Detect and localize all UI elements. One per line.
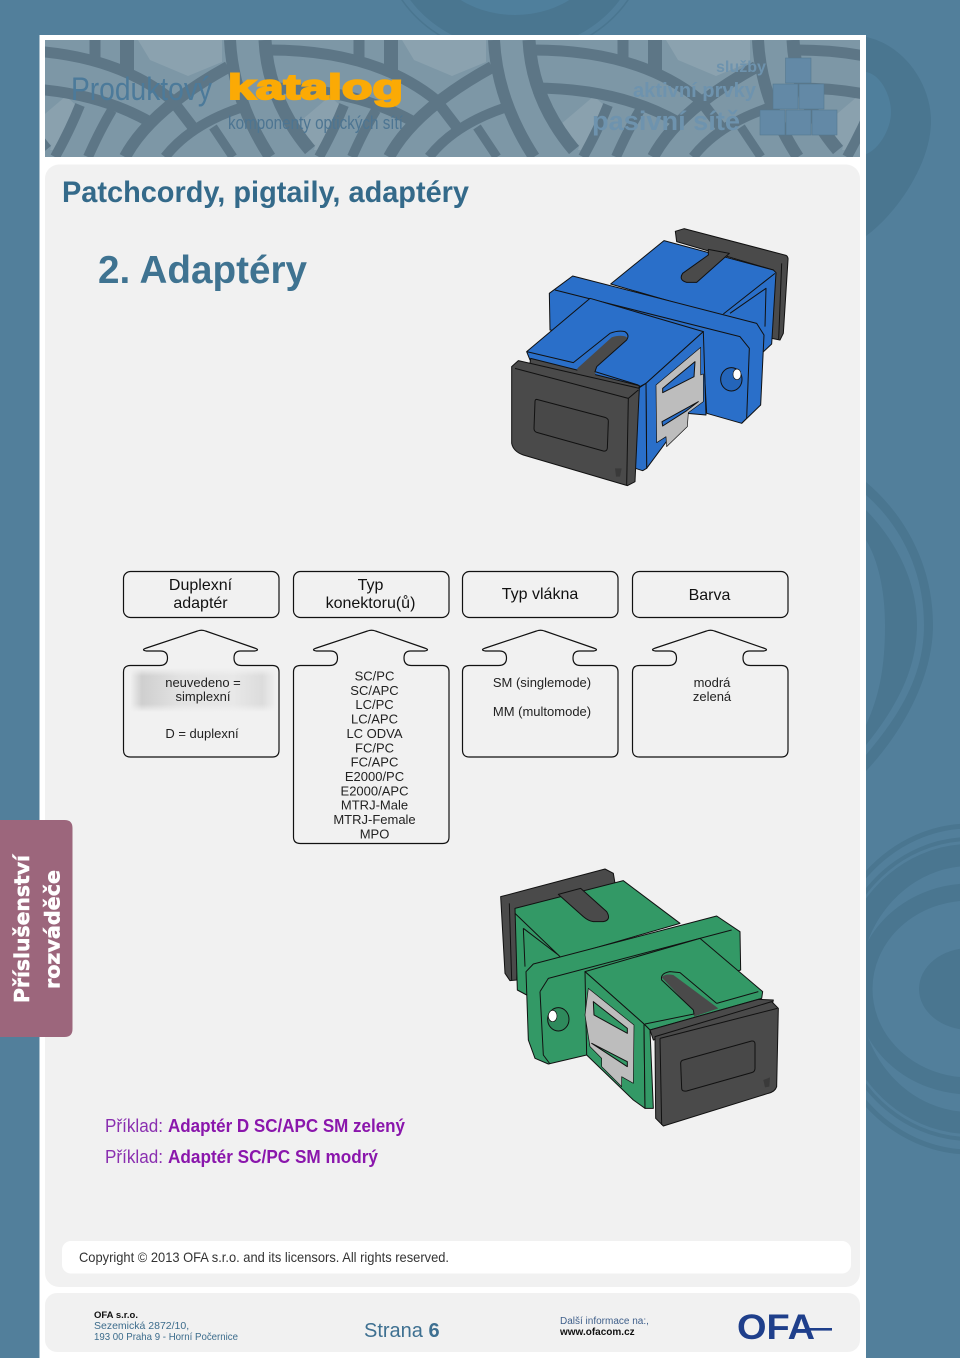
heading: Adaptéry: 2. Adaptéry: [98, 249, 307, 292]
footer address: Sezemická 2872/10,: [94, 1320, 189, 1332]
footer web info: Další informace na:,: [560, 1316, 649, 1327]
header subtitle: komponenty optických sítí: [228, 113, 403, 133]
callout: colours: [632, 630, 788, 757]
box: Duplexní adaptér: [124, 572, 279, 618]
header label: služby: služby: [716, 59, 766, 76]
copyright bar: Copyright © 2013 OFA s.r.o. and its licensors. All rights reserved.: [79, 1249, 449, 1265]
text block: examples: Příklad:: [105, 1147, 163, 1167]
callout: connector types: SC/PC: [355, 668, 394, 684]
callout: duplex options: D = duplexní: [165, 726, 239, 741]
diagram: ordering code: [124, 572, 788, 844]
box: Barva: [632, 572, 788, 618]
header label: aktivní prvky: aktivní prvky: [633, 80, 757, 102]
header title: Produktový: Produktový: [71, 71, 212, 107]
callout: connector types: SC/APC: [350, 683, 399, 698]
heading: section title: Patchcordy, pigtaily, adaptéry: [62, 176, 469, 209]
callout: connector types: LC ODVA: [346, 726, 403, 741]
footer web info: www.ofacom.cz: [559, 1327, 635, 1338]
side tab: category: [0, 820, 72, 1037]
callout: colours: modrá: [694, 675, 731, 690]
header banner: [45, 40, 860, 157]
illustration: blue SC adapter: [512, 229, 788, 486]
side tab label: rozváděče: rozváděče: [40, 870, 64, 989]
box: Typ konektoru: [294, 572, 449, 618]
callout: colours: zelená: [693, 689, 732, 704]
callout: duplex options: [124, 630, 279, 757]
side tab label: Příslušenství: Příslušenství: [10, 854, 34, 1003]
header title: katalog: katalog: [228, 68, 403, 107]
callout: duplex options: simplexní: [176, 689, 231, 704]
page number: Strana 6: [364, 1320, 440, 1342]
callout: connector types: MTRJ-Male: [341, 798, 408, 813]
callout: fiber types: MM (multomode): [493, 704, 591, 719]
callout: duplex options: neuvedeno =: [165, 675, 241, 690]
footer address: 193 00 Praha 9 - Horní Počernice: [94, 1331, 238, 1343]
box: Typ konektoru: Typ: [358, 577, 383, 594]
box: Typ konektoru: konektoru(ů): [326, 594, 415, 612]
callout: fiber types: [462, 630, 618, 757]
copyright bar: [62, 1241, 851, 1274]
callout: fiber types: SM (singlemode): [493, 675, 591, 690]
box: Duplexní adaptér: adaptér: [173, 595, 228, 612]
callout: connector types: [294, 630, 449, 844]
text block: examples: Adaptér SC/PC SM modrý: [168, 1147, 378, 1167]
callout: connector types: LC/APC: [351, 712, 398, 727]
icon: block pyramid: [760, 58, 837, 135]
footer address: [94, 1310, 238, 1343]
box: Typ vlákna: Typ vlákna: [502, 586, 578, 603]
panel: footer: [45, 1293, 860, 1352]
callout: connector types: MTRJ-Female: [333, 812, 416, 827]
logo: OFA: OFA: [737, 1308, 815, 1347]
text block: examples: Příklad:: [105, 1116, 163, 1136]
callout: connector types: FC/PC: [355, 740, 394, 755]
box: Typ vlákna: [462, 572, 618, 618]
illustration: green SC adapter: [501, 869, 778, 1126]
box: Barva: Barva: [689, 587, 730, 604]
callout: connector types: E2000/APC: [341, 783, 408, 798]
footer web info: [559, 1316, 649, 1338]
text block: examples: [105, 1116, 405, 1167]
footer address: OFA s.r.o.: [94, 1310, 138, 1321]
callout: connector types: FC/APC: [351, 755, 398, 770]
callout: connector types: E2000/PC: [345, 769, 404, 784]
panel: main content: [45, 164, 860, 1287]
text block: examples: Adaptér D SC/APC SM zelený: [168, 1116, 405, 1136]
header label: pasivní sítě: pasivní sítě: [592, 106, 740, 136]
callout: connector types: LC/PC: [355, 697, 394, 712]
box: Duplexní adaptér: Duplexní: [169, 577, 233, 594]
callout: connector types: MPO: [360, 826, 389, 842]
